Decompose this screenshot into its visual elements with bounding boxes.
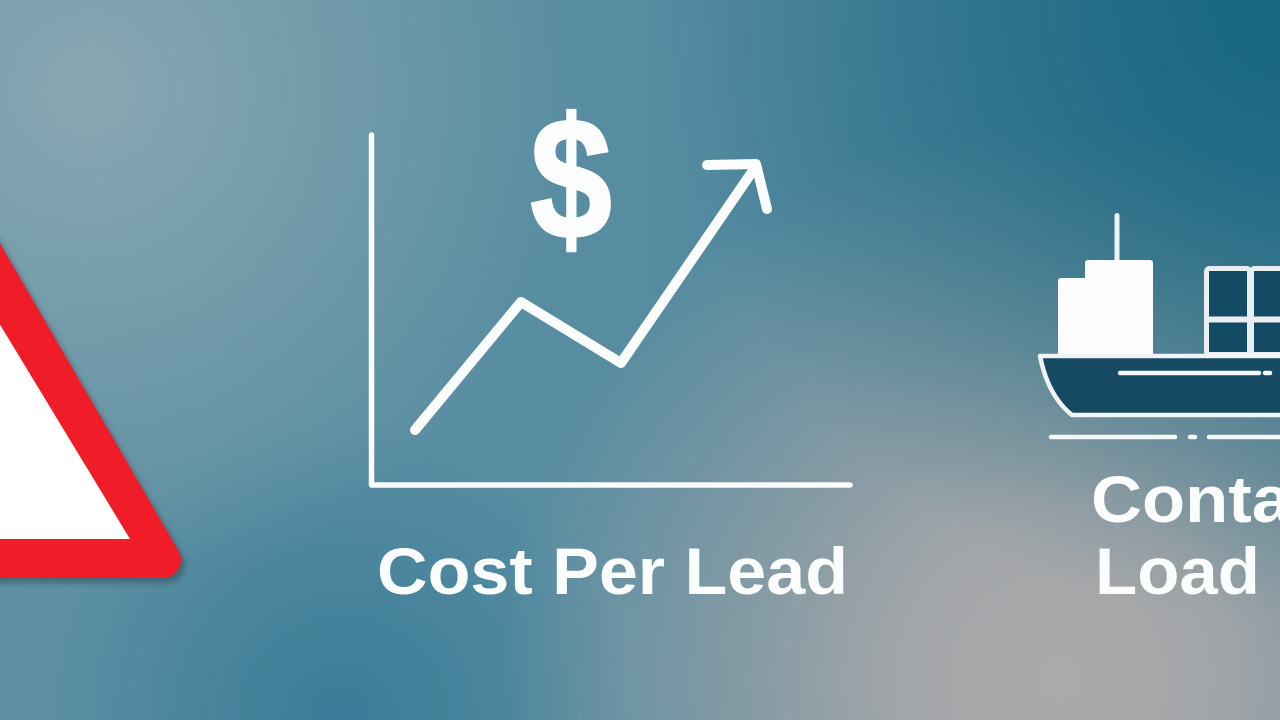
icon: container ship xyxy=(1040,213,1280,437)
hull stripe xyxy=(1120,371,1270,375)
icon: warning triangle xyxy=(0,245,167,565)
ship mast xyxy=(1114,213,1120,263)
rising trend arrow xyxy=(415,164,767,430)
label: Container Load xyxy=(1091,463,1280,608)
label: Cost Per Lead: Cost Per Lead xyxy=(377,534,848,608)
icon: dollar sign: $ xyxy=(530,83,612,275)
label: Container Load: Load xyxy=(1095,534,1260,608)
line chart: rising cost xyxy=(372,135,850,485)
chart axes xyxy=(372,135,850,485)
water line xyxy=(1051,435,1280,439)
ship bridge xyxy=(1058,260,1153,355)
ship hull xyxy=(1040,356,1280,415)
containers xyxy=(1206,268,1280,354)
